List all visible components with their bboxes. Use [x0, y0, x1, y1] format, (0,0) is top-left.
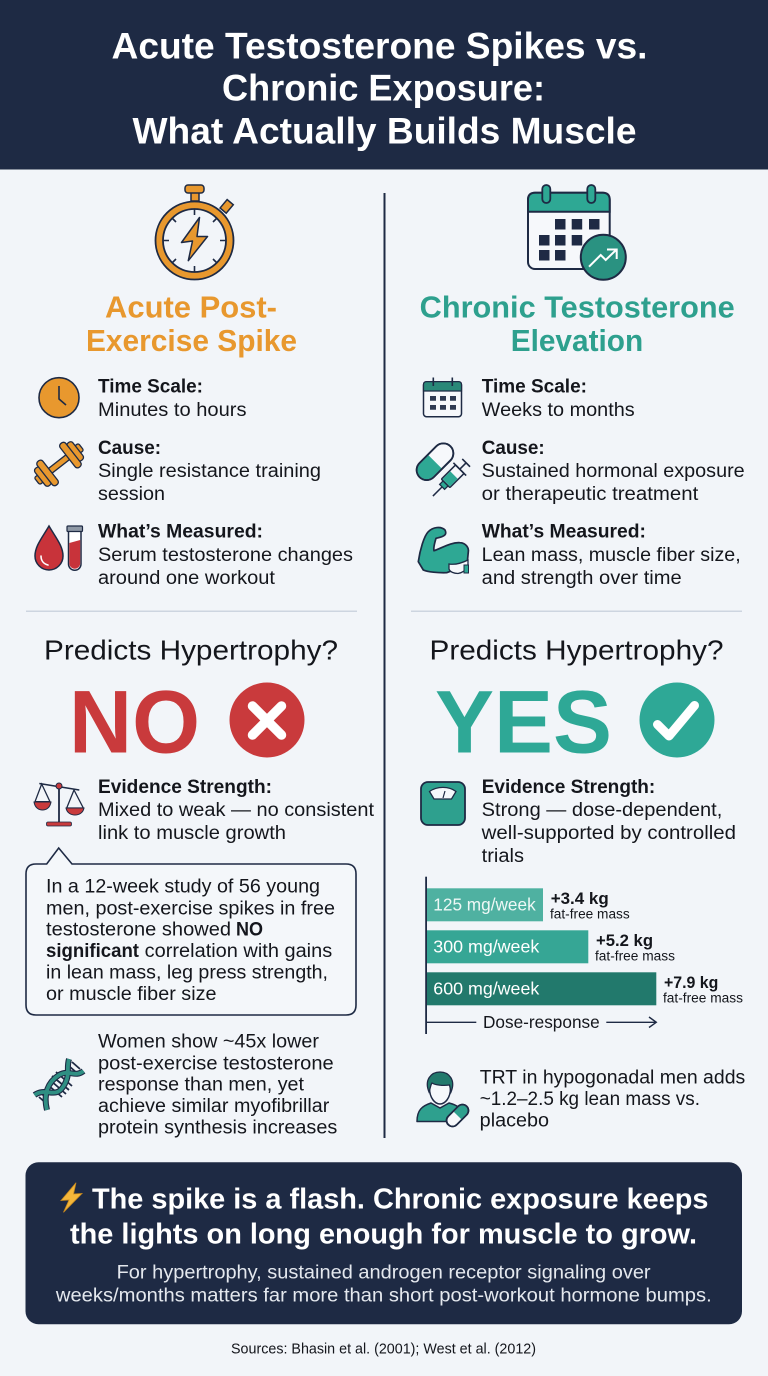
- callout: 12-week study: NO: [236, 920, 263, 941]
- bar: 300 mg/week: +5.2 kg: [596, 931, 653, 950]
- takeaway detail: For hypertrophy, sustained androgen receptor signaling over: [117, 1261, 651, 1283]
- bar chart: dose-response: [425, 877, 743, 1034]
- verdict: yes: [435, 671, 714, 771]
- heading: chronic testosterone elevation: [420, 290, 735, 358]
- icon: stopwatch with lightning bolt: [156, 185, 234, 280]
- text: what's measured right: What’s Measured:: [482, 521, 646, 543]
- callout: 12-week study: testosterone showed: [46, 920, 231, 941]
- text: evidence strength left: Evidence Strength:: [98, 776, 272, 798]
- takeaway banner: [26, 1162, 742, 1324]
- text: cause right: or therapeutic treatment: [482, 483, 699, 505]
- text: time scale right: [482, 376, 635, 421]
- takeaway headline: the lights on long enough for muscle to grow.: [70, 1218, 697, 1250]
- text: cause: Single resistance training: [98, 460, 321, 482]
- bar: 600 mg/week: 600 mg/week: [433, 979, 540, 999]
- icon: dumbbell: [28, 435, 90, 493]
- icon: calendar with growth badge: [528, 185, 626, 280]
- text: cause right: [482, 437, 745, 505]
- text: what's measured: Serum testosterone changes: [98, 544, 353, 566]
- title banner: What Actually Builds Muscle: [132, 110, 636, 152]
- text: what's measured right: and strength over time: [482, 567, 682, 589]
- text: what's measured right: Lean mass, muscle fiber size,: [482, 544, 741, 566]
- bar: 600 mg/week: [427, 972, 743, 1006]
- text: women comparison: [98, 1032, 337, 1139]
- verdict: no: NO: [69, 671, 200, 771]
- text: what's measured: around one workout: [98, 567, 276, 589]
- icon: flexed arm with tape measure: [418, 528, 468, 574]
- text: trt in hypogonadal men: TRT in hypogonadal men adds: [480, 1066, 746, 1088]
- title banner: [0, 0, 768, 170]
- icon: clock: [39, 378, 79, 418]
- takeaway headline: The spike is a flash. Chronic exposure keeps: [92, 1183, 708, 1215]
- text: cause right: Cause:: [482, 437, 545, 459]
- text: evidence strength left: Mixed to weak — no consistent: [98, 799, 375, 821]
- callout: 12-week study: In a 12-week study of 56 young: [46, 877, 320, 898]
- heading: acute post-exercise spike: [86, 290, 297, 358]
- text: what's measured: [98, 521, 353, 589]
- text: evidence strength right: Strong — dose-dependent,: [482, 799, 722, 821]
- heading: acute post-exercise spike: Acute Post-: [105, 290, 277, 324]
- text: time scale: Minutes to hours: [98, 399, 247, 421]
- text: trt in hypogonadal men: placebo: [480, 1110, 549, 1132]
- callout: 12-week study: [26, 848, 356, 1015]
- heading: acute post-exercise spike: Exercise Spike: [86, 324, 297, 358]
- text: women comparison: achieve similar myofibrillar: [98, 1096, 330, 1117]
- takeaway detail: weeks/months matters far more than short post-workout hormone bumps.: [55, 1285, 712, 1307]
- text: evidence strength right: Evidence Strength:: [482, 776, 655, 798]
- text: evidence strength right: trials: [482, 845, 524, 867]
- callout: 12-week study: men, post-exercise spikes in free: [46, 898, 335, 919]
- icon: small calendar: [424, 378, 462, 417]
- icon: lightning bolt: [61, 1183, 82, 1212]
- icon: balance scale: [34, 783, 84, 826]
- text: evidence strength left: link to muscle growth: [98, 822, 286, 844]
- bar: 600 mg/week: fat-free mass: [663, 991, 743, 1006]
- text: time scale: [98, 376, 247, 421]
- title banner: Chronic Exposure:: [222, 68, 545, 108]
- callout: 12-week study: in lean mass, leg press strength,: [46, 962, 328, 984]
- text: cause: session: [98, 483, 165, 505]
- text: women comparison: protein synthesis increases: [98, 1118, 337, 1139]
- bar: 300 mg/week: [427, 930, 675, 964]
- icon: blood drop and test tube: [35, 526, 82, 570]
- bar: 600 mg/week: +7.9 kg: [664, 973, 718, 992]
- text: what's measured right: [482, 521, 741, 589]
- bar: 300 mg/week: fat-free mass: [595, 949, 675, 964]
- icon: capsule and syringe: [413, 439, 473, 502]
- heading: predicts hypertrophy left: Predicts Hypertrophy?: [44, 634, 338, 666]
- heading: chronic testosterone elevation: Chronic Testosterone: [420, 290, 735, 324]
- icon: dna helix: [34, 1059, 84, 1110]
- sources: Sources: Bhasin et al. (2001); West et al. (2012): [231, 1341, 536, 1357]
- text: cause right: Sustained hormonal exposure: [482, 460, 745, 482]
- callout: 12-week study: or muscle fiber size: [46, 984, 216, 1005]
- bar: 125 mg/week: [427, 888, 630, 922]
- text: evidence strength right: [481, 776, 736, 867]
- text: women comparison: Women show ~45x lower: [98, 1032, 320, 1053]
- text: what's measured: What’s Measured:: [98, 521, 263, 543]
- callout: 12-week study: significant: [46, 941, 140, 962]
- text: women comparison: post-exercise testosterone: [98, 1053, 334, 1074]
- text: women comparison: response than men, yet: [98, 1075, 305, 1096]
- text: trt in hypogonadal men: [480, 1066, 746, 1132]
- text: evidence strength left: [98, 776, 375, 844]
- text: cause: [98, 437, 321, 505]
- text: time scale right: Time Scale:: [482, 376, 587, 398]
- text: time scale right: Weeks to months: [482, 399, 635, 421]
- bar: 300 mg/week: 300 mg/week: [433, 937, 540, 957]
- verdict: yes: YES: [435, 671, 612, 771]
- bar: 125 mg/week: +3.4 kg: [551, 889, 609, 908]
- panel: acute post-exercise spike: [26, 185, 375, 1139]
- takeaway headline: [70, 1183, 708, 1250]
- takeaway detail: [55, 1261, 712, 1307]
- arrow: dose-response axis: Dose-response: [483, 1012, 600, 1032]
- heading: predicts hypertrophy right: Predicts Hypertrophy?: [430, 634, 724, 666]
- text: trt in hypogonadal men: ~1.2–2.5 kg lean mass vs.: [480, 1088, 700, 1110]
- callout: 12-week study: correlation with gains: [145, 941, 332, 962]
- text: time scale: Time Scale:: [98, 376, 203, 398]
- title banner: Acute Testosterone Spikes vs.: [112, 26, 648, 66]
- heading: chronic testosterone elevation: Elevation: [511, 324, 643, 358]
- verdict: no: [69, 671, 304, 771]
- bar: 125 mg/week: 125 mg/week: [433, 895, 536, 915]
- text: cause: Cause:: [98, 437, 161, 459]
- icon: bathroom scale: [421, 782, 465, 825]
- arrow: dose-response axis: [426, 1012, 656, 1032]
- panel: chronic testosterone elevation: [413, 185, 746, 1132]
- bar: 125 mg/week: fat-free mass: [550, 907, 630, 922]
- text: evidence strength right: well-supported by controlled: [481, 822, 736, 844]
- icon: man with capsule: [417, 1072, 471, 1129]
